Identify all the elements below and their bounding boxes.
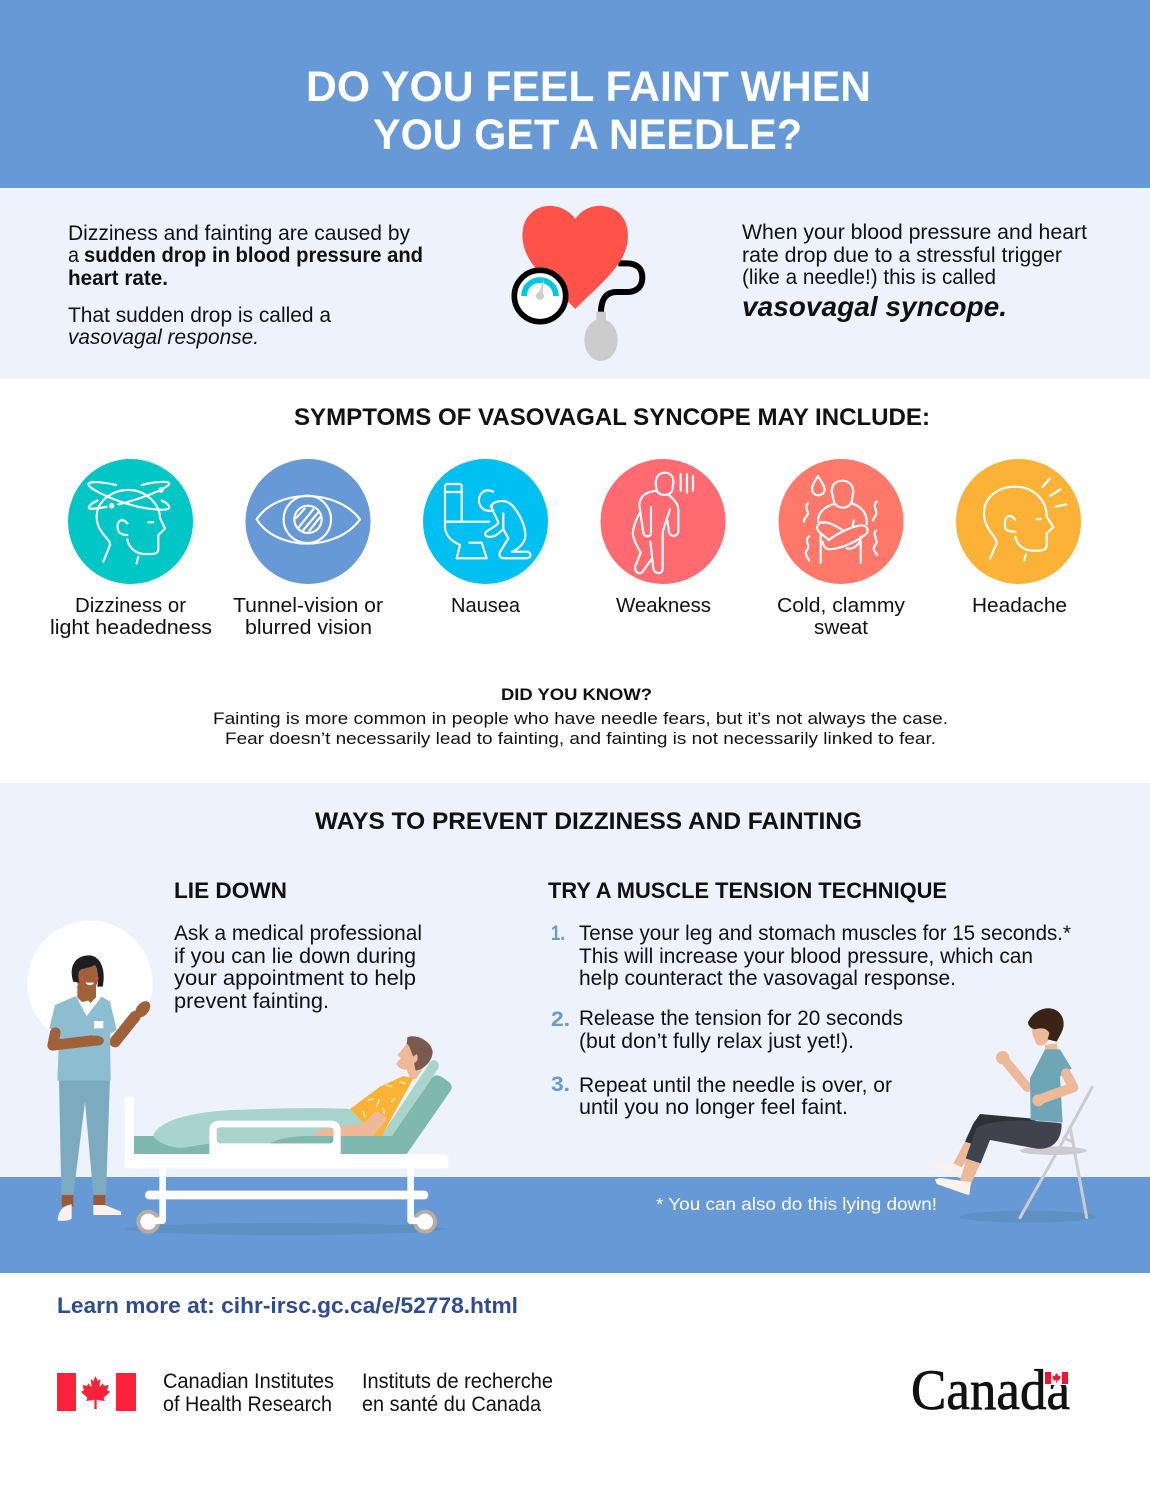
organisation name: Instituts de recherche xyxy=(362,1370,553,1393)
label: Dizziness or xyxy=(75,595,186,617)
text block: muscle tension technique xyxy=(548,878,1071,1119)
logo: CIHR xyxy=(57,1370,553,1416)
text block: cause of fainting: Dizziness and fainting are caused by xyxy=(68,222,410,245)
shadow xyxy=(125,1223,445,1235)
icon: head with pain rays xyxy=(984,478,1066,561)
title: YOU GET A NEEDLE? xyxy=(373,111,802,159)
text block: lie down xyxy=(174,878,422,1013)
person xyxy=(928,1008,1073,1195)
text block: did you know: Fainting is more common in people who have needle fears, but it’s not always the case. xyxy=(213,709,948,728)
text block: muscle tension technique: 1. xyxy=(551,922,565,945)
text block: did you know: DID YOU KNOW? xyxy=(501,685,652,704)
header banner xyxy=(0,0,1150,188)
text block: vasovagal syncope definition: When your blood pressure and heart xyxy=(742,221,1087,244)
chair xyxy=(1020,1087,1092,1218)
text block: muscle tension technique: Release the tension for 20 seconds xyxy=(579,1007,903,1030)
footnote: * You can also do this lying down! xyxy=(656,1194,937,1214)
organisation name: Canadian Institutes xyxy=(163,1370,334,1393)
text block: muscle tension technique: Tense your leg and stomach muscles for 15 seconds.* xyxy=(579,922,1071,945)
label: Cold, clammy xyxy=(777,595,905,617)
text block: muscle tension technique: until you no longer feel faint. xyxy=(579,1096,848,1119)
label: Weakness xyxy=(616,595,711,617)
text block: muscle tension technique: Repeat until the needle is over, or xyxy=(579,1074,892,1097)
panel: intro xyxy=(0,188,1150,378)
text block: vasovagal syncope definition xyxy=(742,221,1087,322)
text block: cause of fainting: sudden drop in blood pressure and xyxy=(84,244,423,267)
text block: vasovagal syncope definition: rate drop due to a stressful trigger xyxy=(742,244,1062,267)
icon: weak person xyxy=(633,473,693,573)
text block: vasovagal syncope definition: vasovagal syncope. xyxy=(742,291,1007,322)
illustration: nurse and patient on bed xyxy=(27,921,452,1235)
label xyxy=(233,595,383,639)
text block: muscle tension technique: This will increase your blood pressure, which can xyxy=(579,945,1033,968)
text block: lie down: Ask a medical professional xyxy=(174,922,422,945)
text block: cause of fainting: vasovagal response. xyxy=(68,326,259,349)
label xyxy=(777,595,905,639)
label: sweat xyxy=(814,617,868,639)
bed frame xyxy=(125,1097,448,1232)
title xyxy=(306,63,871,159)
text block: muscle tension technique: (but don’t fully relax just yet!). xyxy=(579,1030,854,1053)
icon: shivering person xyxy=(804,476,877,563)
icon: spinning head xyxy=(88,482,169,563)
label: Tunnel-vision or xyxy=(233,595,383,617)
text block: vasovagal syncope definition: (like a needle!) this is called xyxy=(742,266,996,289)
text block: cause of fainting: a xyxy=(68,244,79,267)
text block: lie down: LIE DOWN xyxy=(174,878,287,903)
title: DO YOU FEEL FAINT WHEN xyxy=(306,63,871,111)
text block: muscle tension technique: help counteract the vasovagal response. xyxy=(579,967,956,990)
text block: cause of fainting: That sudden drop is called a xyxy=(68,304,331,327)
symptom: cold sweat xyxy=(777,459,905,639)
heading: symptoms: SYMPTOMS OF VASOVAGAL SYNCOPE MAY INCLUDE: xyxy=(294,404,930,431)
symptom: tunnel vision xyxy=(233,459,383,639)
organisation name: en santé du Canada xyxy=(362,1393,541,1416)
text block: lie down: prevent fainting. xyxy=(174,990,329,1013)
text block: muscle tension technique: 3. xyxy=(551,1073,570,1096)
label: Nausea xyxy=(451,595,521,617)
icon: heart with blood pressure cuff xyxy=(514,206,642,361)
heading: prevention: WAYS TO PREVENT DIZZINESS AND FAINTING xyxy=(315,808,862,835)
label: light headedness xyxy=(50,617,212,639)
text block: lie down: if you can lie down during xyxy=(174,945,416,968)
text block: did you know: Fear doesn’t necessarily lead to fainting, and fainting is not necessarily linked to fear. xyxy=(225,729,936,748)
icon: eye xyxy=(257,496,360,544)
text block: lie down: your appointment to help xyxy=(174,967,416,990)
organisation name xyxy=(163,1370,553,1416)
patient xyxy=(153,1036,433,1148)
icon: Canadian flag xyxy=(57,1373,136,1411)
illustration: person tensing muscles on chair xyxy=(928,1008,1097,1223)
shadow xyxy=(960,1211,1097,1223)
label: Headache xyxy=(972,595,1067,617)
logo: Canada wordmark: Canada xyxy=(911,1359,1070,1422)
text block: muscle tension technique: TRY A MUSCLE TENSION TECHNIQUE xyxy=(548,878,947,903)
symptom: weakness xyxy=(600,459,726,617)
link: learn more: Learn more at: cihr-irsc.gc.ca/e/52778.html xyxy=(57,1293,518,1318)
symptom: nausea xyxy=(423,459,548,617)
text block: did you know xyxy=(213,685,948,748)
text block: muscle tension technique: 2. xyxy=(551,1008,570,1031)
text block: cause of fainting xyxy=(68,222,423,349)
bed xyxy=(134,1060,452,1154)
symptom: dizziness xyxy=(50,459,212,639)
label: blurred vision xyxy=(245,617,372,639)
label xyxy=(50,595,212,639)
panel: prevention xyxy=(0,783,1150,1273)
icon: wordmark flag xyxy=(1044,1371,1069,1385)
text block: cause of fainting: heart rate. xyxy=(68,267,168,290)
organisation name: of Health Research xyxy=(163,1393,332,1416)
symptom: headache xyxy=(956,459,1081,617)
nurse xyxy=(49,955,153,1221)
icon: person at toilet xyxy=(445,484,530,558)
